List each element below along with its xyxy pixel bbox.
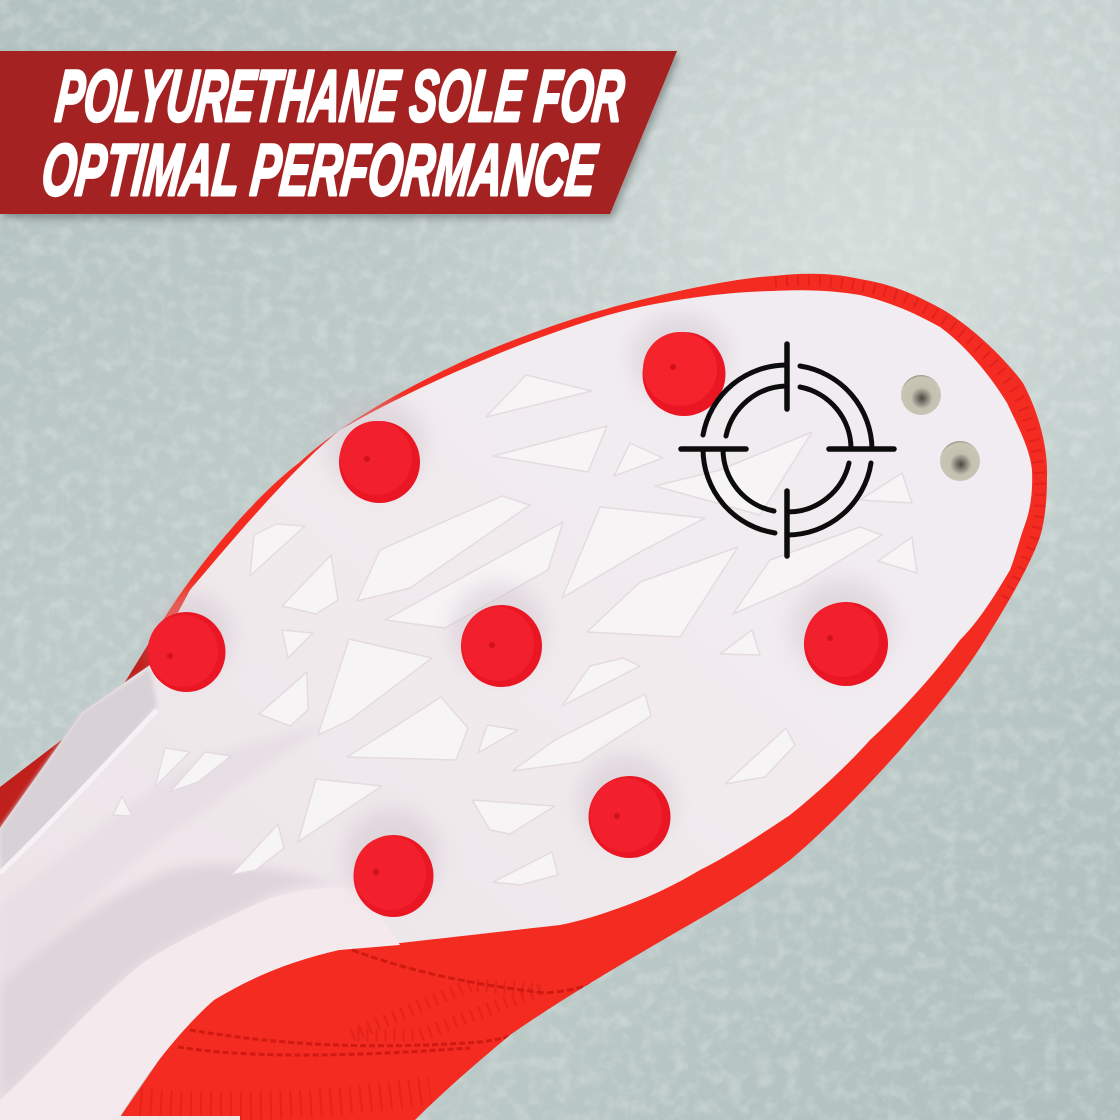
stud 3	[148, 612, 226, 692]
upper details: ribbed toe edge, stitching and ribbed panels	[140, 281, 1040, 1106]
highlight ridge	[0, 710, 157, 873]
stud 1	[339, 421, 420, 503]
sole tread pattern	[113, 375, 917, 885]
middle shaded channel	[0, 720, 330, 983]
metal rivets	[901, 375, 980, 481]
stud 5	[804, 602, 888, 686]
stud 4	[461, 605, 542, 687]
title text: POLYURETHANE SOLE FOR	[52, 55, 628, 137]
gray upper channel	[0, 668, 157, 873]
title text: OPTIMAL PERFORMANCE	[38, 129, 601, 211]
red studs	[148, 332, 888, 917]
polyurethane sole plate, white	[0, 290, 1032, 1120]
sole arch ridges	[0, 668, 400, 1120]
title text	[38, 55, 628, 211]
football boot upper, red	[118, 274, 1047, 1120]
lower white band	[0, 887, 400, 1120]
banner shape	[0, 51, 677, 214]
stud 2	[642, 332, 726, 416]
dark red heel strip	[0, 570, 215, 828]
stud shadows	[148, 314, 892, 904]
title banner	[0, 51, 677, 214]
lower gray band	[0, 865, 339, 1100]
stud 7	[354, 835, 434, 917]
stud 6	[588, 776, 670, 858]
white lace trim at bottom	[112, 1116, 240, 1120]
icon: crosshair target	[681, 344, 894, 556]
